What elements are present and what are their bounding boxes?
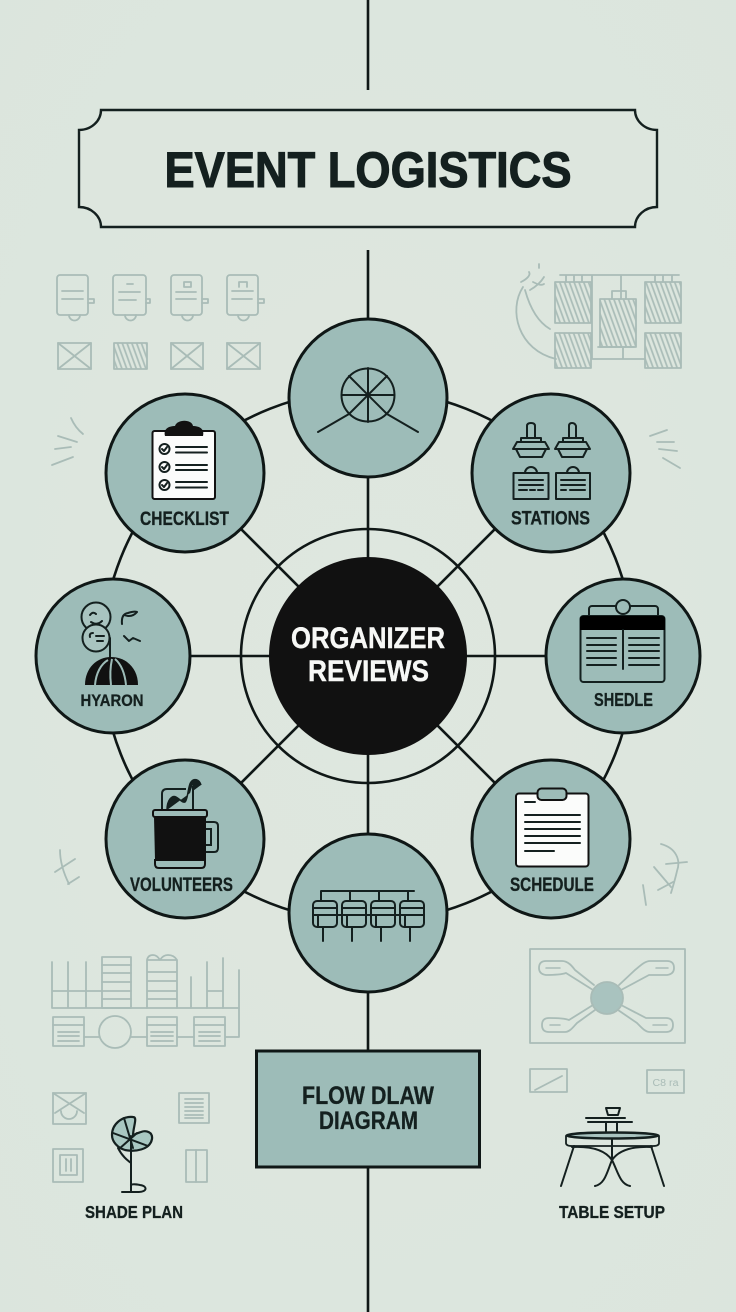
node: stations [472,394,630,552]
flow diagram box: DIAGRAM [319,1107,418,1135]
faint suitcase icons row [57,275,264,320]
icon: plant dome [82,602,140,685]
label: VOLUNTEERS [130,875,233,896]
bottom node: seating row [289,834,447,992]
faint network board [530,949,685,1043]
icon: baskets and cases [513,423,590,499]
node: shedle [546,579,700,733]
title banner: EVENT LOGISTICS [164,142,572,198]
central vertical axis line [367,0,369,1312]
faint small chart and code icons: C8 ra [652,1078,679,1089]
node: volunteers [106,760,264,918]
flow diagram box [256,1051,480,1167]
icon: seats [313,891,424,941]
center hub: organizer reviews: ORGANIZER [291,622,445,655]
faint spark marks right [650,430,680,468]
center hub: organizer reviews: REVIEWS [308,655,429,688]
icon: shade fan [112,1117,152,1192]
faint track layout diagram [52,955,239,1048]
label: shade plan: SHADE PLAN [85,1202,183,1222]
node: schedule [472,760,630,918]
label: table setup: TABLE SETUP [559,1202,665,1222]
faint small plan icons left [53,1093,209,1182]
label: CHECKLIST [140,509,229,530]
icon: document clipboard [516,788,588,866]
faint small chart and code icons [530,1069,684,1093]
icon: clipboard [152,421,215,499]
top node: wheel [289,319,447,477]
faint floor plan with hatched blocks [516,264,681,368]
faint crate icons row [58,343,260,369]
node: hyaron [36,579,190,733]
faint spark marks lower right [643,844,687,905]
icon: table setup [561,1108,664,1186]
faint spark marks lower left [55,850,79,884]
label: SCHEDULE [510,875,594,896]
network connectors [102,390,634,922]
label: HYARON [80,691,144,710]
faint spark marks left [52,418,83,465]
icon: binder schedule [580,600,665,682]
title banner [79,110,657,227]
label: STATIONS [511,508,590,530]
icon: wheel [318,368,418,432]
node: checklist [106,394,264,552]
flow diagram box: FLOW DLAW [302,1082,434,1110]
icon: coffee mug [153,780,218,868]
label: SHEDLE [594,690,653,710]
center hub: organizer reviews [269,557,467,755]
